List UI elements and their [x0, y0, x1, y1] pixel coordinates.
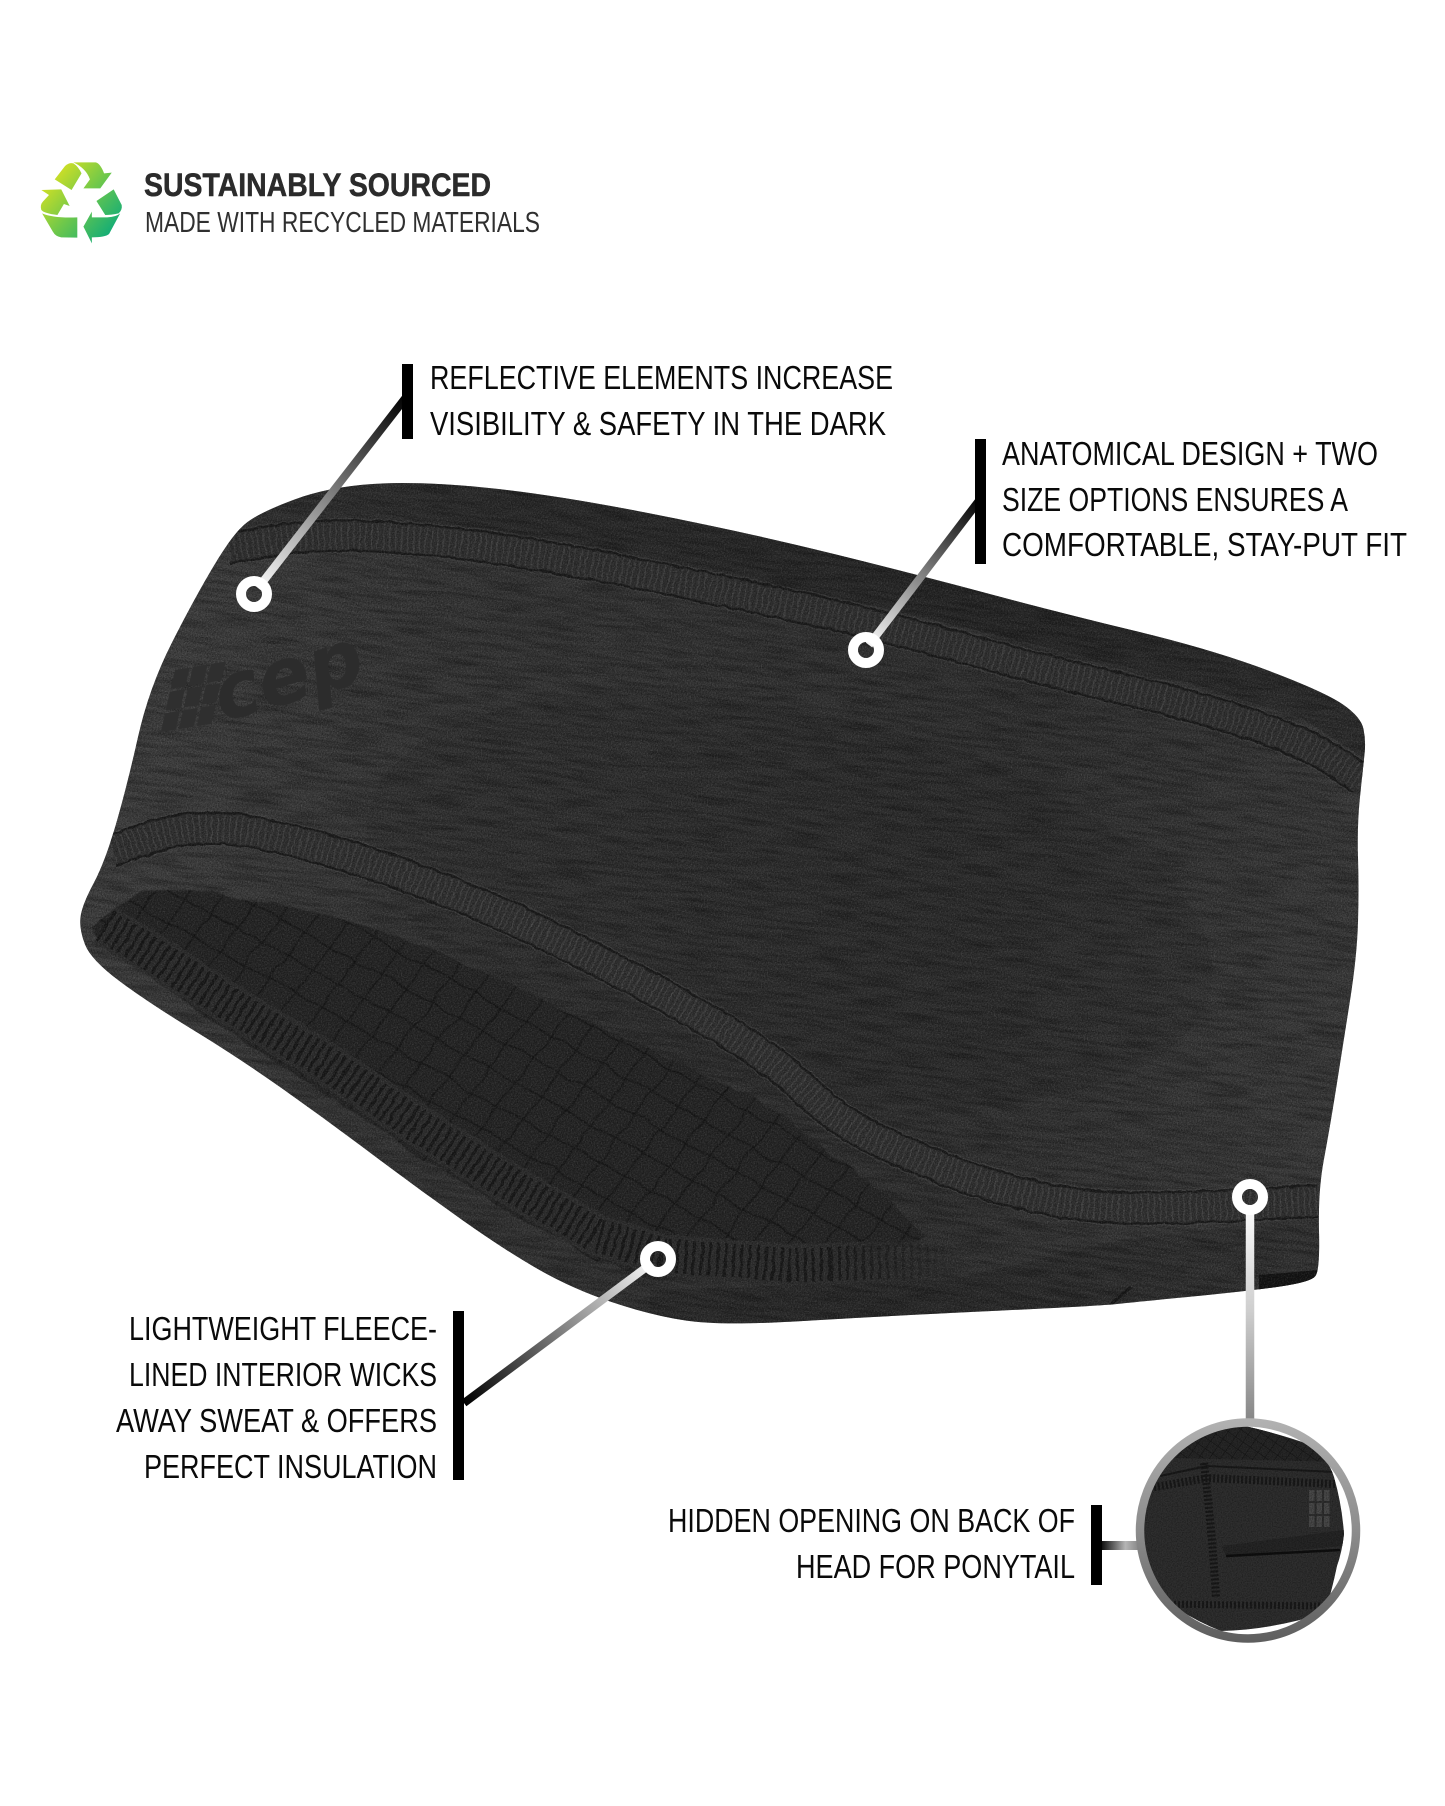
inset seams — [1160, 1466, 1335, 1476]
leader line — [1246, 1210, 1254, 1422]
darker mid-body shading — [330, 625, 1250, 1175]
bar — [402, 364, 413, 439]
leader line — [258, 396, 407, 588]
dark lip below ponytail opening — [1259, 1270, 1318, 1290]
callout: reflective elements: VISIBILITY & SAFETY IN THE DARK — [430, 405, 886, 442]
bar — [1091, 1505, 1102, 1585]
bar — [975, 439, 986, 564]
top seam — [228, 536, 1361, 779]
icon: recycling symbol — [41, 162, 122, 243]
leader line — [464, 1263, 652, 1403]
label text: HIDDEN OPENING ON BACK OF — [668, 1502, 1075, 1539]
callout: fleece-lined interior — [116, 1246, 671, 1485]
back hem tack — [1110, 1287, 1131, 1305]
fabric textures — [60, 460, 1390, 1340]
connector — [1102, 1541, 1138, 1550]
callout: anatomical design: SIZE OPTIONS ENSURES A — [1002, 481, 1348, 518]
logo mark grid — [161, 662, 226, 732]
inset opening fold — [1222, 1530, 1344, 1556]
inset texture — [1144, 1428, 1344, 1631]
heading: SUSTAINABLY SOURCED — [144, 167, 491, 203]
callout: hidden ponytail opening — [668, 1184, 1360, 1645]
lower seam — [112, 828, 1318, 1208]
fleece lining with diamond grid — [93, 889, 925, 1281]
logo wordmark: cep — [202, 612, 373, 740]
callout: hidden ponytail opening: HEAD FOR PONYTAIL — [796, 1548, 1075, 1585]
label text: LIGHTWEIGHT FLEECE- — [129, 1310, 437, 1347]
lower hem shading — [650, 1215, 1330, 1325]
bar — [453, 1311, 464, 1480]
inset fabric — [1144, 1426, 1344, 1631]
marker dot — [241, 581, 267, 607]
callout: reflective elements — [241, 359, 893, 607]
header: sustainably sourced badge — [41, 162, 540, 243]
callout: fleece-lined interior: LINED INTERIOR WICKS — [129, 1356, 437, 1393]
inset: back of headband — [1130, 1415, 1360, 1645]
logo: cep — [161, 612, 373, 740]
product photo: headband — [80, 483, 1366, 1324]
callout: fleece-lined interior: PERFECT INSULATION — [144, 1448, 437, 1485]
marker dot — [1237, 1184, 1263, 1210]
inset fleece strip — [1176, 1426, 1321, 1462]
inset ring — [1140, 1422, 1356, 1638]
top hem — [200, 470, 1370, 762]
heather mottling — [80, 484, 1365, 1324]
callout: anatomical design — [853, 435, 1407, 663]
inset logo mark — [1309, 1490, 1330, 1527]
lining stitch band — [105, 925, 965, 1265]
marker dot — [853, 637, 879, 663]
subheading: MADE WITH RECYCLED MATERIALS — [145, 207, 540, 239]
marker dot — [645, 1246, 671, 1272]
callout: fleece-lined interior: AWAY SWEAT & OFFERS — [116, 1402, 437, 1439]
label text: REFLECTIVE ELEMENTS INCREASE — [430, 359, 893, 396]
outer fabric — [60, 460, 1390, 1340]
leader line — [869, 498, 981, 645]
